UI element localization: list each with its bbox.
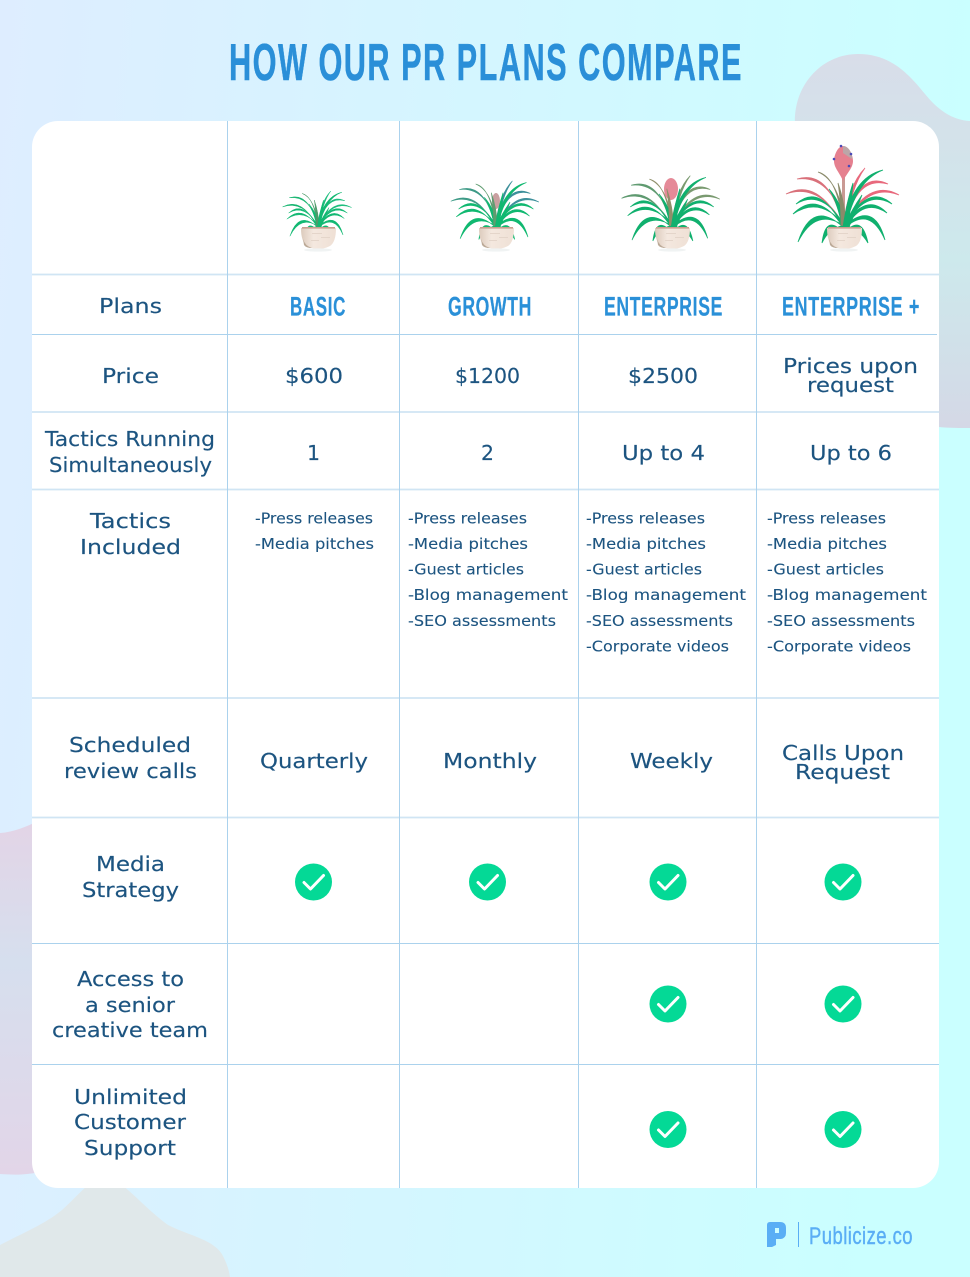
- row labels: Customer: [74, 1110, 187, 1134]
- tactics running simultaneously values: 1: [307, 441, 320, 465]
- row labels: a senior: [85, 993, 176, 1017]
- prices: $2500: [628, 364, 698, 388]
- row labels: [44, 294, 215, 1160]
- tactics list: growth: -SEO assessments: [408, 612, 556, 630]
- table grid lines: [32, 121, 939, 1188]
- tactics running simultaneously values: 2: [481, 441, 494, 465]
- tactics list: growth: -Press releases: [408, 510, 527, 528]
- tactics list: enterprise plus: -SEO assessments: [767, 612, 915, 630]
- icon: enterprise plus plant: [786, 145, 899, 252]
- row labels: Media: [96, 852, 165, 876]
- blob: bottom left: [0, 1185, 230, 1277]
- scheduled review call values: Calls Upon: [782, 741, 904, 765]
- tactics list: enterprise: -Press releases: [586, 510, 705, 528]
- tactics list: growth: [408, 510, 568, 630]
- logo: Publicize.co: [767, 1222, 913, 1250]
- tactics running simultaneously values: [307, 441, 892, 465]
- icon: enterprise plant: [622, 176, 720, 252]
- row labels: Access to: [77, 967, 184, 991]
- row labels: Plans: [99, 294, 162, 318]
- tactics list: enterprise plus: -Guest articles: [767, 560, 884, 578]
- blob: top right: [795, 54, 970, 428]
- row labels: Tactics Running: [44, 427, 215, 451]
- tactics list: enterprise: [586, 510, 746, 656]
- tactics list: enterprise: -SEO assessments: [586, 612, 733, 630]
- tactics list: enterprise plus: [767, 510, 927, 656]
- prices: $600: [285, 364, 343, 388]
- icon: basic plant: [283, 191, 352, 252]
- tactics running simultaneously values: Up to 6: [810, 441, 892, 465]
- blob: left: [0, 820, 40, 1175]
- tactics running simultaneously values: Up to 4: [622, 441, 705, 465]
- row labels: Strategy: [82, 878, 179, 902]
- row labels: Price: [102, 364, 159, 388]
- check marks: [295, 864, 862, 1148]
- row labels: review calls: [64, 759, 197, 783]
- plan names: ENTERPRISE: [604, 292, 723, 322]
- plan names: GROWTH: [448, 292, 532, 322]
- scheduled review call values: Monthly: [443, 749, 537, 773]
- row labels: Simultaneously: [49, 453, 212, 477]
- tactics list: enterprise plus: -Blog management: [767, 586, 927, 604]
- scheduled review call values: [260, 741, 904, 784]
- tactics list: basic: -Media pitches: [255, 535, 374, 553]
- tactics list: basic: -Press releases: [255, 510, 373, 528]
- tactics list: growth: -Media pitches: [408, 535, 528, 553]
- prices: request: [807, 373, 894, 397]
- row labels: Unlimited: [74, 1085, 187, 1109]
- tactics list: enterprise: -Media pitches: [586, 535, 706, 553]
- tactics list: growth: -Blog management: [408, 586, 568, 604]
- row labels: Scheduled: [69, 733, 191, 757]
- tactics list: basic: [255, 510, 374, 553]
- tactics list: enterprise: -Guest articles: [586, 560, 702, 578]
- prices: $1200: [455, 364, 520, 388]
- tactics list: enterprise: -Blog management: [586, 586, 746, 604]
- tactics list: enterprise plus: -Corporate videos: [767, 638, 911, 656]
- scheduled review call values: Request: [795, 760, 890, 784]
- plan names: BASIC: [290, 292, 346, 322]
- tactics list: enterprise plus: -Media pitches: [767, 535, 887, 553]
- scheduled review call values: Quarterly: [260, 749, 368, 773]
- prices: [285, 354, 918, 397]
- table card: [32, 121, 939, 1188]
- prices: Prices upon: [783, 354, 918, 378]
- tactics list: growth: -Guest articles: [408, 560, 524, 578]
- row labels: Tactics: [89, 509, 171, 533]
- tactics list: enterprise plus: -Press releases: [767, 510, 886, 528]
- logo: Publicize.co: Publicize.co: [809, 1223, 913, 1250]
- row labels: Support: [84, 1136, 176, 1160]
- plan names: [290, 292, 920, 322]
- row labels: Included: [80, 535, 181, 559]
- tactics list: enterprise: -Corporate videos: [586, 638, 729, 656]
- row labels: creative team: [52, 1018, 208, 1042]
- icon: growth plant: [451, 181, 539, 252]
- scheduled review call values: Weekly: [630, 749, 713, 773]
